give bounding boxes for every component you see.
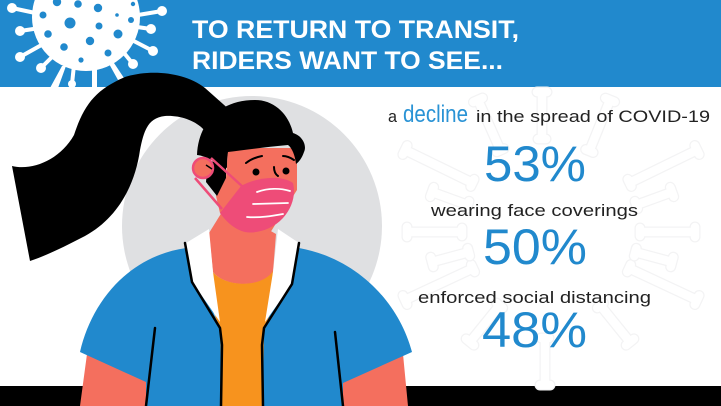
hair (197, 100, 305, 168)
heading: RIDERS WANT TO SEE... (192, 47, 503, 75)
faint virus watermark (403, 92, 699, 385)
arms (80, 354, 408, 406)
stat block: face coverings (430, 201, 638, 275)
stat block: decline (388, 101, 710, 192)
hair behind ear (206, 160, 226, 196)
neck (209, 212, 276, 284)
eyes (252, 168, 290, 176)
value 53%: 53% (484, 136, 586, 192)
lapels (186, 229, 299, 322)
value 50%: 50% (483, 219, 587, 275)
stat block: social distancing: enforced social distancing (418, 288, 651, 307)
mask (220, 178, 294, 232)
ear (193, 158, 213, 178)
heading (192, 16, 519, 75)
bottom black band (0, 386, 721, 406)
icon: virus in header (7, 0, 167, 88)
backdrop circle (122, 96, 382, 356)
mask straps (195, 158, 243, 209)
stat block: decline: in the spread of COVID-19 (476, 107, 710, 126)
heading: TO RETURN TO TRANSIT, (192, 16, 519, 44)
stat block: decline: decline (403, 101, 468, 128)
figure: masked rider (12, 73, 412, 406)
header band (0, 0, 721, 87)
value 48%: 48% (482, 302, 587, 358)
brows and nose (246, 156, 294, 176)
stat block: decline: a (388, 107, 398, 126)
stat block: social distancing (418, 288, 651, 358)
shirt (212, 271, 273, 406)
jacket seams (146, 243, 343, 406)
ponytail (12, 73, 232, 261)
stat block: face coverings: wearing face coverings (430, 201, 638, 220)
mask pleats (247, 189, 290, 217)
face (216, 148, 297, 233)
jacket (80, 248, 412, 406)
